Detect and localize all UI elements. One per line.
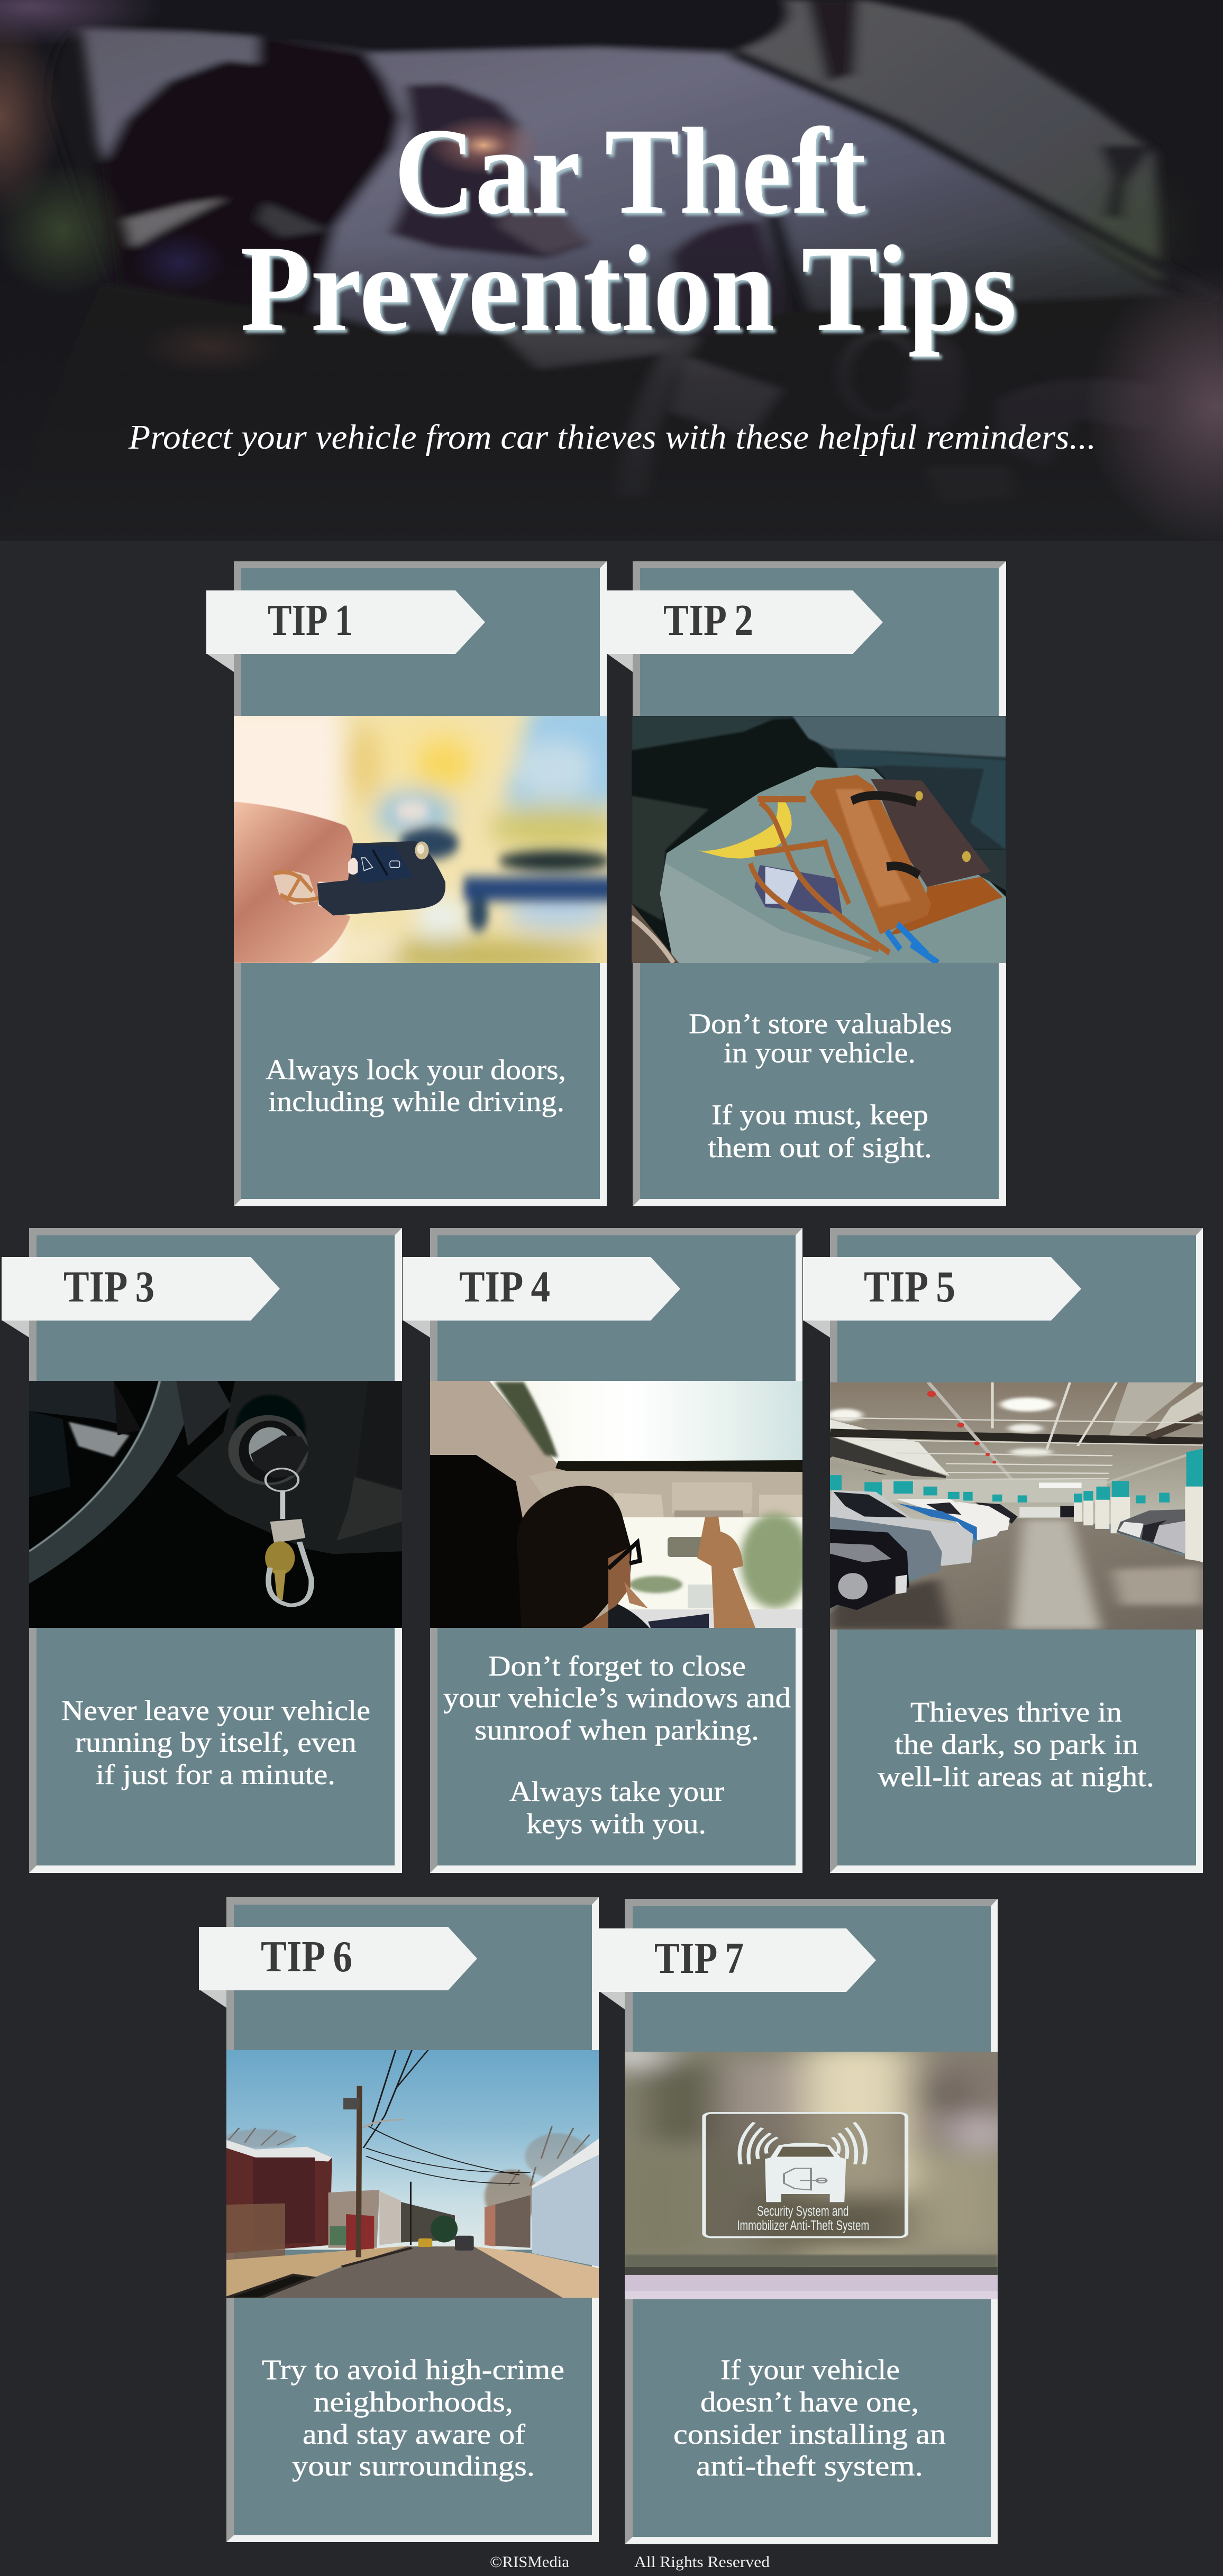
footer credits: ©RISMedia [490,2553,569,2571]
ribbon label: TIP 5 [864,1262,955,1312]
ribbon label: TIP 6 [261,1932,352,1981]
tip text: consider installing an [673,2418,946,2450]
tip text: including while driving. [268,1086,564,1117]
tip text [443,1650,791,1840]
tip text [262,2354,564,2482]
tip text: Try to avoid high-crime [262,2354,564,2386]
tip text: sunroof when parking. [474,1714,759,1746]
ribbon label: TIP 7 [654,1934,744,1983]
card frame [633,561,1006,1206]
card frame [430,1228,802,1873]
ribbon label: TIP 3 [63,1262,154,1312]
ribbon label: TIP 4 [459,1262,550,1312]
tip text: them out of sight. [708,1132,932,1163]
tip text: neighborhoods, [314,2386,513,2418]
photo: driver closing the sunroof [430,1381,802,1628]
tip text: doesn’t have one, [700,2386,919,2418]
tip text: if just for a minute. [96,1759,335,1790]
footer credits: All Rights Reserved [634,2553,770,2571]
header banner [0,0,1223,549]
tip text [689,1008,952,1163]
tip text: If your vehicle [720,2354,900,2386]
card frame [234,561,607,1206]
photo: bag and banana on car seat [632,716,1006,963]
photo: anti-theft window sticker: Security System and [757,2203,848,2218]
header photo: thief at car window [0,0,1223,541]
tip text: Thieves thrive in [910,1696,1122,1728]
tip text [266,1054,566,1117]
banana [698,795,792,859]
bag [887,877,1003,936]
panel: tip 3 [2,1228,402,1873]
ribbon label [199,1927,477,2008]
photo: well-lit parking garage [830,1382,1203,1630]
phone and straps [754,865,842,915]
photo: hand holding key fob [234,716,607,963]
tip text [673,2354,946,2482]
card frame [29,1228,402,1873]
tip text [878,1696,1154,1792]
ribbon label [607,590,883,672]
ribbon label: TIP 2 [663,596,753,645]
tip text: well-lit areas at night. [878,1761,1154,1792]
tip text: Always lock your doors, [266,1054,566,1086]
tip text: Don’t store valuables [689,1008,952,1040]
panel: tip 7 [599,1899,1010,2544]
tip text: Never leave your vehicle [61,1695,370,1726]
ribbon label [403,1257,680,1337]
photo: keys left in ignition [29,1381,402,1628]
tip text: in your vehicle. [724,1037,916,1069]
tip text: running by itself, even [75,1726,357,1758]
title: Prevention Tips [240,220,1017,357]
ribbon label: TIP 1 [268,596,353,645]
card frame [830,1228,1203,1873]
card frame [226,1897,599,2542]
tip text [61,1695,370,1790]
photo: run-down street [226,2050,599,2298]
panel: tip 1 [206,561,621,1206]
tip text: your vehicle’s windows and [443,1682,791,1714]
ribbon label [2,1257,280,1337]
tip text: anti-theft system. [696,2450,923,2482]
ribbon label [599,1928,876,2009]
panel: tip 5 [803,1228,1203,1873]
panel: tip 4 [403,1228,809,1873]
subtitle: Protect your vehicle from car thieves with these helpful reminders... [128,418,1096,457]
panel: tip 2 [607,561,1006,1206]
tip text: and stay aware of [303,2418,525,2450]
tip text: keys with you. [526,1808,706,1840]
tip text: Don’t forget to close [488,1650,746,1682]
ribbon label [206,590,485,672]
title: Car Theft [394,102,866,240]
tip text: the dark, so park in [895,1728,1138,1760]
card frame [625,1899,998,2544]
photo: anti-theft window sticker [625,2052,998,2299]
title [240,102,1017,357]
tip text: If you must, keep [711,1099,928,1131]
panel: tip 6 [199,1897,599,2542]
tip text: your surroundings. [292,2450,535,2482]
ribbon label [803,1257,1081,1337]
tip text: Always take your [509,1776,724,1807]
footer credits [490,2553,770,2571]
